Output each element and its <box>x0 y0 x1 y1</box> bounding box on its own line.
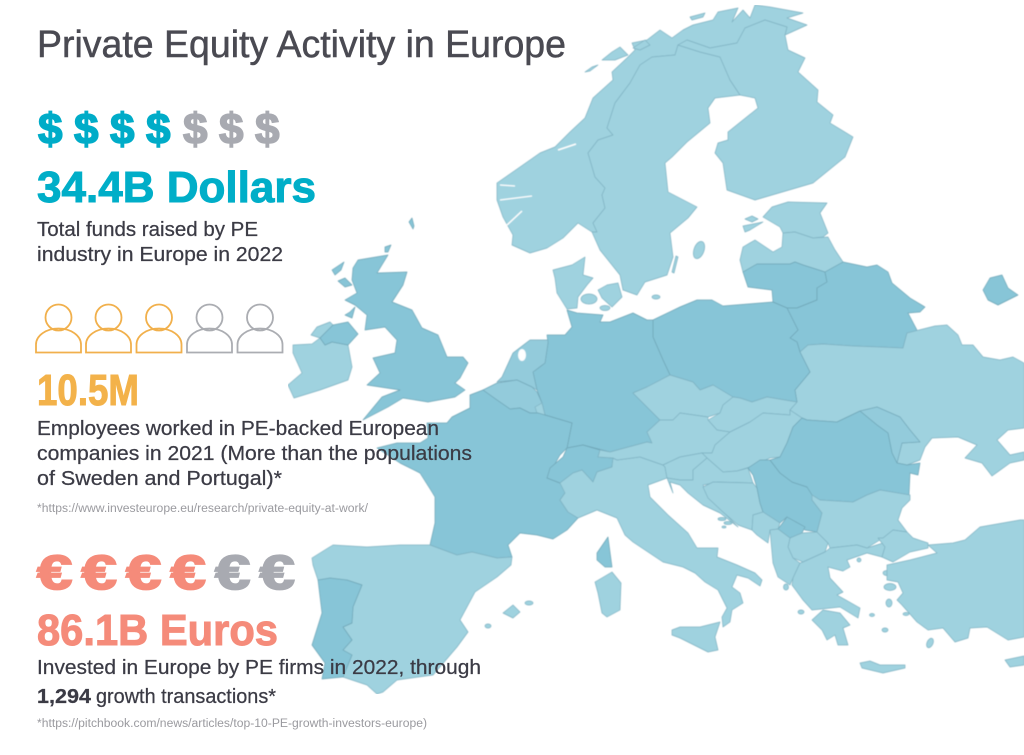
footnote: Invest Europe source: *https://www.investeurope.eu/research/private-equity-at-work/ <box>37 503 369 515</box>
icons: dollar signs: $ <box>38 105 62 154</box>
icons: dollar signs: $ <box>74 105 98 154</box>
footnote: PitchBook source: *https://pitchbook.com/news/articles/top-10-PE-growth-investors-europe) <box>37 718 427 730</box>
map of Europe <box>288 5 1024 694</box>
stat: employees <box>36 304 472 515</box>
Lithuania <box>743 262 827 308</box>
Albania <box>770 529 800 585</box>
Serbia <box>748 460 822 532</box>
Sardinia <box>595 572 621 617</box>
description: investment: Invested in Europe by PE firms in 2022, through <box>37 656 481 679</box>
stat: funds raised <box>37 105 316 266</box>
Bulgaria <box>812 490 910 548</box>
icons: dollar signs: $ <box>255 105 279 154</box>
Dalmatian islands <box>718 518 732 528</box>
description: funds raised: Total funds raised by PE <box>37 218 258 241</box>
Poland <box>653 300 810 402</box>
Montenegro <box>752 512 780 543</box>
Hungary <box>702 410 802 472</box>
Croatia <box>667 458 753 527</box>
Spain <box>312 545 512 694</box>
icons: euro signs: € <box>37 545 72 599</box>
figure: 10.5M: 10.5M <box>37 366 139 415</box>
Turkey <box>878 520 1024 642</box>
description: transactions: 1,294 <box>37 685 92 708</box>
icons: dollar signs: $ <box>219 105 243 154</box>
Italy <box>560 457 762 627</box>
Belarus <box>787 262 925 352</box>
Germany <box>533 310 670 452</box>
description: transactions: growth transactions* <box>96 685 276 708</box>
Finland <box>678 20 853 200</box>
icons: euro signs: € <box>170 545 206 599</box>
Baltic islands <box>652 216 763 299</box>
Latvia <box>740 232 843 272</box>
Sicily <box>672 622 720 652</box>
icons: euro signs: € <box>82 545 117 599</box>
figure: 34.4B Dollars: 34.4B Dollars <box>37 163 316 212</box>
Corsica <box>597 537 612 567</box>
icons: dollar signs: $ <box>110 105 134 154</box>
figure: 86.1B Euros: 86.1B Euros <box>37 606 278 655</box>
Scottish islands <box>332 218 414 318</box>
Kosovo <box>778 517 805 538</box>
Norwegian islands and fjords <box>500 13 705 225</box>
icons: people <box>36 304 282 352</box>
icons: euro signs: € <box>260 545 295 599</box>
Bosnia <box>703 482 763 530</box>
Moldova <box>860 407 920 463</box>
Norway <box>497 5 807 253</box>
description: employees: of Sweden and Portugal)* <box>37 467 282 490</box>
Czech Republic <box>633 375 733 420</box>
Northern Ireland <box>320 322 358 345</box>
Denmark <box>553 257 622 310</box>
North Macedonia <box>788 532 828 562</box>
Portugal <box>312 578 362 679</box>
IJsselmeer <box>518 349 526 361</box>
icons: euro signs <box>37 545 295 599</box>
Switzerland <box>547 445 613 483</box>
Great Britain <box>345 255 468 420</box>
description: employees: Employees worked in PE-backed European <box>37 417 439 440</box>
Luxembourg <box>535 403 545 416</box>
Austria <box>598 413 730 465</box>
icons: dollar signs: $ <box>146 105 170 154</box>
Ireland <box>288 322 352 398</box>
stat: investment <box>37 545 481 730</box>
description: funds raised: industry in Europe in 2022 <box>37 243 283 266</box>
Balearic islands <box>485 601 533 628</box>
Netherlands <box>497 340 548 390</box>
icons: euro signs: € <box>126 545 161 599</box>
France <box>377 390 578 558</box>
Slovakia <box>708 397 797 432</box>
Estonia <box>763 202 828 238</box>
icons: dollar signs <box>38 105 279 154</box>
description: employees: companies in 2021 (More than the populations <box>37 442 472 465</box>
Belgium <box>483 380 542 413</box>
Sweden <box>588 45 740 295</box>
title: Private Equity Activity in Europe <box>37 24 566 66</box>
Ukraine <box>790 325 1024 476</box>
icons: dollar signs: $ <box>183 105 207 154</box>
Romania <box>770 411 920 502</box>
Slovenia <box>663 453 707 480</box>
icons: euro signs: € <box>215 545 250 599</box>
Cyprus <box>1005 656 1024 667</box>
Greece <box>784 543 935 673</box>
Moscow region <box>983 275 1018 305</box>
